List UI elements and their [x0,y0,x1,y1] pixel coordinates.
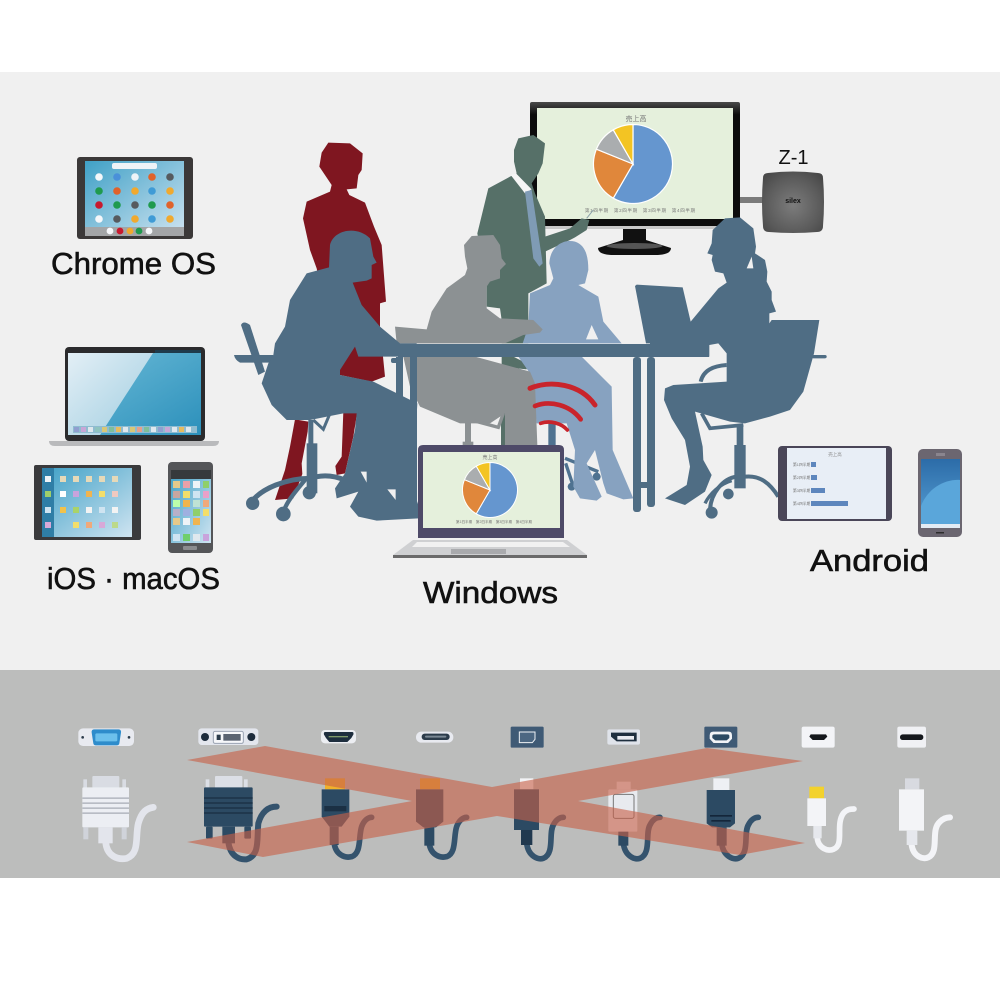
standing woman, red [275,143,386,500]
port: DisplayPort [607,729,640,745]
tablet: Android: 第2四半期 [793,475,811,480]
port: mini DisplayPort [511,727,544,748]
red cross over unsupported connectors [187,746,805,857]
Z-1 connection cable [740,197,764,203]
label: Z-1: Z-1 [778,147,808,169]
tablet: Chrome OS [77,157,193,239]
pie chart: monitor [594,124,673,204]
tablet: Android: 第4四半期 [793,501,811,506]
cable: DVI, navy [204,776,277,859]
laptop: Windows: 第1四半期 第2四半期 第3四半期 第4四半期 [456,519,532,524]
label: Windows: Windows [423,575,558,610]
people and table silhouettes [234,135,827,521]
port: VGA [78,728,134,746]
icon: red wireless signal arcs [530,384,595,430]
phone: Android [918,449,962,537]
seated woman with laptop, dark blue [635,217,827,519]
Z-1 receiver device [762,172,824,233]
port: HDMI [321,730,356,743]
monitor with pie chart [530,102,740,255]
seated man on chair, dark blue [234,231,418,521]
Z-1 receiver device: silex [785,198,801,205]
cable: DisplayPort, white [608,782,660,859]
bar chart: Android tablet [811,462,848,506]
panel: scene background [0,72,1000,670]
tablet: Android: 第3四半期 [793,488,811,493]
label: Android: Android [810,543,929,578]
label: Chrome OS: Chrome OS [51,246,216,281]
seated man, grey [395,235,543,445]
cable: mini HDMI, navy with gold tip [416,778,467,857]
monitor with pie chart: 売上高 [626,114,646,123]
panel: connector strip background [0,670,1000,878]
pie chart: laptop [463,462,518,518]
port: mini HDMI [416,732,453,743]
cable: HDMI, navy with gold tip [322,778,372,857]
monitor with pie chart: 第1四半期 第2四半期 第3四半期 第4四半期 [585,207,696,214]
port: USB-C [897,727,926,748]
laptop: Windows [393,445,587,558]
port: micro USB [802,727,835,748]
cable: VGA, white [82,776,153,859]
tablet: Android: 売上高 [828,451,842,458]
connector row: left group [78,728,467,859]
standing presenter, green [477,135,593,445]
cable: USB-C, white [899,778,950,858]
port: mini DVI [704,727,737,748]
cable: micro USB, white with yellow tip [807,787,854,850]
seated woman, light blue [518,241,633,501]
laptop: Windows: 売上高 [482,454,498,461]
phone: iOS [168,462,213,553]
laptop: macOS [49,347,219,446]
table [391,344,709,512]
tablet: Android [778,446,892,521]
tablet: iOS [34,465,141,540]
label: iOS · macOS: iOS · macOS [47,561,220,596]
cable: mini DVI, navy [707,778,758,859]
connector row: right group [511,727,950,859]
tablet: Android: 第1四半期 [793,462,811,467]
port: DVI [198,728,258,745]
cable: mini DisplayPort, navy [514,778,563,859]
